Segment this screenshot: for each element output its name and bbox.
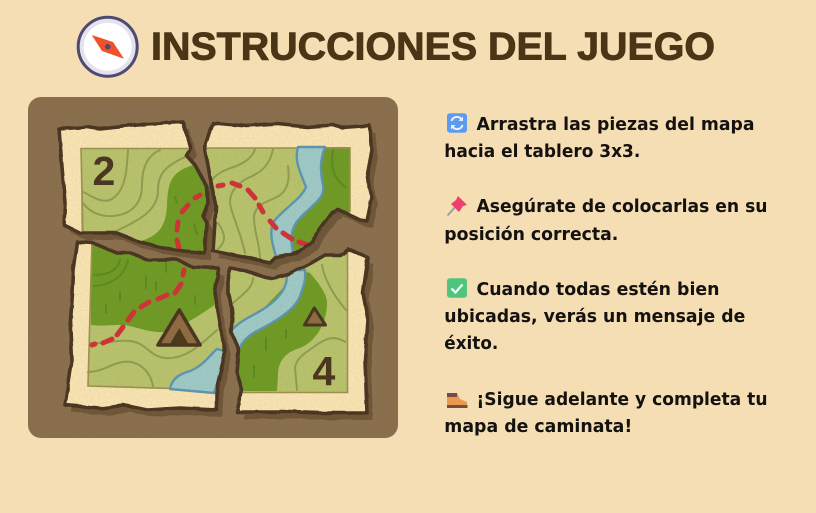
instruction 1 (444, 113, 754, 162)
instructions page (28, 16, 766, 438)
title: INSTRUCCIONES DEL JUEGO (151, 26, 715, 68)
icon: arrows button (447, 113, 467, 133)
text 2 (444, 197, 768, 245)
text 4 (444, 390, 768, 437)
text 4: ¡Sigue adelante y completa tu (476, 390, 768, 410)
text 3: éxito. (444, 334, 498, 354)
text 3 (444, 280, 745, 354)
icon: check mark (447, 278, 467, 298)
instruction 4 (444, 390, 768, 437)
instruction 2 (444, 196, 768, 245)
map piece top right (203, 123, 378, 270)
text 1: hacia el tablero 3x3. (444, 142, 640, 162)
map piece 2 (59, 122, 216, 262)
icon: pushpin (448, 196, 467, 215)
instruction 3 (444, 278, 745, 354)
map piece 4 (225, 245, 374, 420)
number 4: 4 (312, 348, 336, 394)
icon: small tent (304, 308, 326, 325)
panel: torn map puzzle (28, 97, 398, 438)
text 2: posición correcta. (444, 225, 618, 245)
title icon: compass (78, 17, 137, 76)
number 2: 2 (92, 148, 115, 194)
text 3: Cuando todas estén bien (476, 280, 720, 300)
icon: hiking boot (447, 393, 468, 408)
text 4: mapa de caminata! (444, 417, 632, 437)
text 1: Arrastra las piezas del mapa (476, 115, 754, 135)
text 2: Asegúrate de colocarlas en su (476, 197, 768, 217)
map piece bottom left (65, 240, 231, 417)
text 1 (444, 115, 754, 162)
icon: tent (158, 310, 200, 345)
text 3: ubicadas, verás un mensaje de (444, 307, 745, 327)
